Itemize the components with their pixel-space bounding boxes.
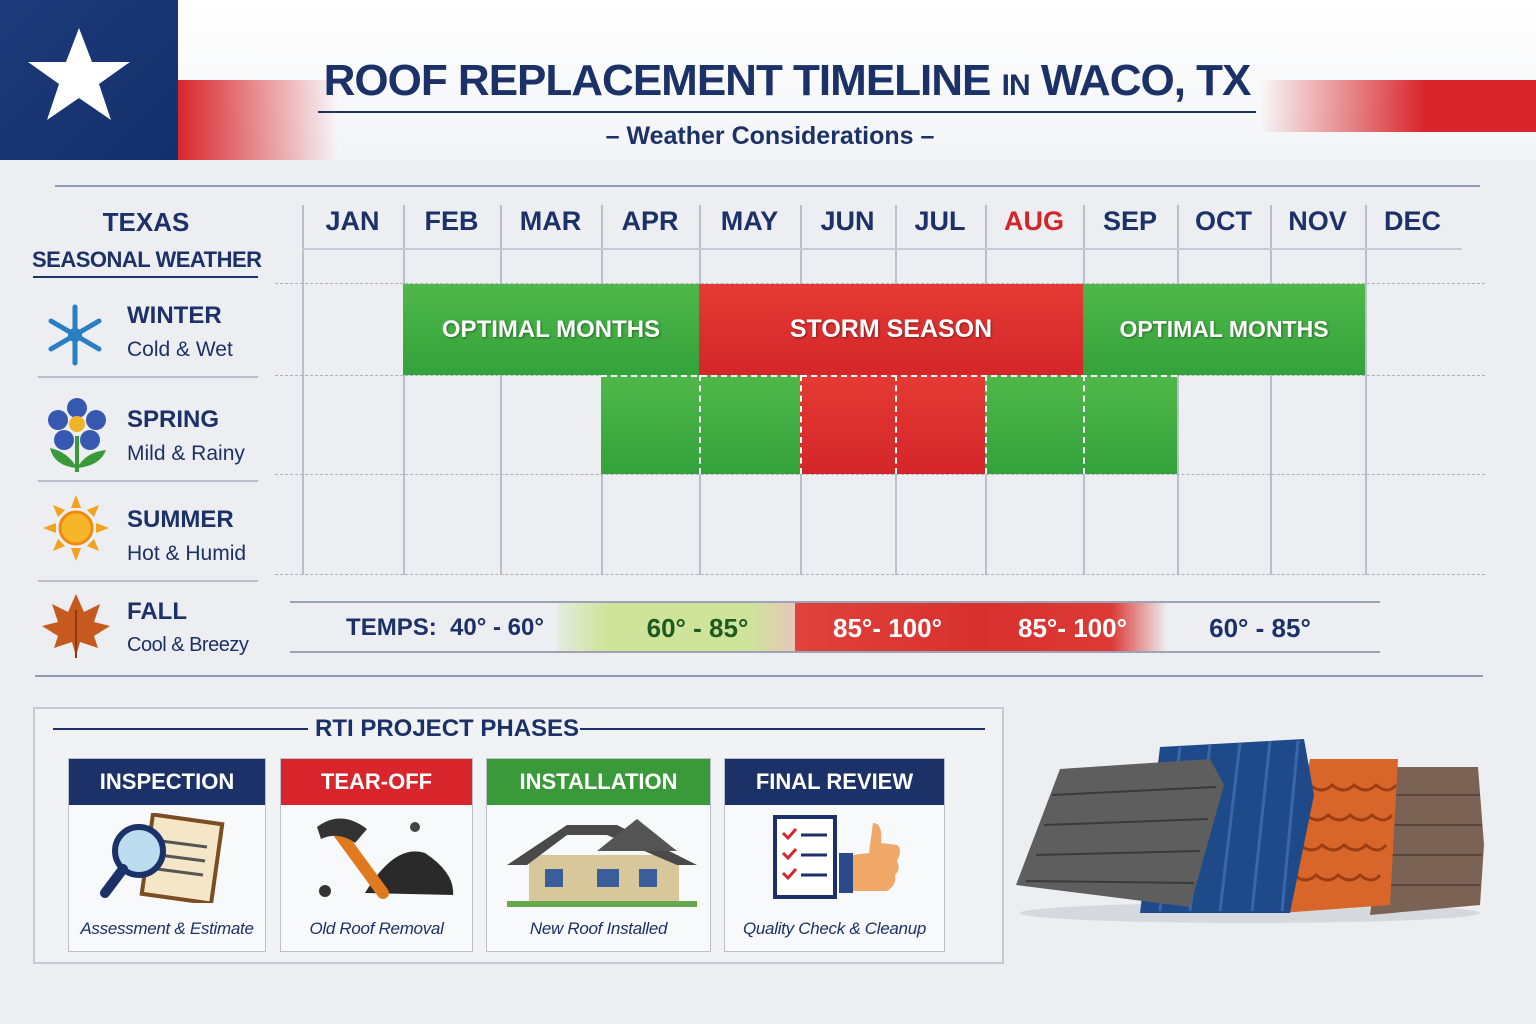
- card: installation: New Roof Installed: [530, 919, 667, 938]
- season: summer: [38, 492, 258, 582]
- row 2 bars: [601, 375, 1177, 474]
- bar: optimal months fall: OPTIMAL MONTHS: [1119, 316, 1329, 342]
- title: ROOF REPLACEMENT TIMELINE IN WACO, TX: [324, 56, 1250, 105]
- bar: optimal months spring: OPTIMAL MONTHS: [442, 316, 660, 342]
- season: winter: WINTER: [127, 302, 222, 329]
- left heading: [32, 207, 262, 272]
- card: tear-off: Old Roof Removal: [309, 919, 444, 938]
- temperature row: [290, 601, 1380, 653]
- month headers: JAN: [325, 206, 380, 236]
- bar: storm season: [699, 284, 1083, 375]
- left heading: TEXAS: [103, 207, 189, 237]
- season: summer: Hot & Humid: [127, 542, 246, 565]
- season: fall: FALL: [127, 598, 187, 625]
- card: inspection: [68, 758, 266, 952]
- temps labels: TEMPS: 40° - 60°: [346, 614, 544, 641]
- text: AUG: [1004, 206, 1064, 236]
- text: JUN: [820, 206, 874, 236]
- card: tear-off: [280, 758, 473, 952]
- season: spring: SPRING: [127, 406, 219, 433]
- card: final review: [724, 758, 945, 952]
- icon: star: [28, 28, 130, 120]
- bar: storm season: STORM SEASON: [790, 315, 992, 343]
- season: spring: [38, 392, 258, 482]
- text: SEP: [1103, 206, 1157, 236]
- text: OCT: [1195, 206, 1252, 236]
- left heading: SEASONAL WEATHER: [32, 247, 262, 272]
- card: installation: INSTALLATION: [519, 769, 678, 794]
- season: fall: [42, 594, 249, 658]
- illustration: roofing material samples: [1016, 739, 1484, 923]
- card: inspection: INSPECTION: [100, 769, 234, 794]
- season: spring: Mild & Rainy: [127, 442, 245, 465]
- panel: project phases: [33, 707, 1004, 964]
- text: APR: [621, 206, 678, 236]
- bar: optimal months spring: [403, 284, 699, 375]
- text: MAR: [520, 206, 581, 236]
- card: final review: Quality Check & Cleanup: [743, 919, 926, 938]
- card: tear-off: TEAR-OFF: [321, 769, 432, 794]
- card: final review: FINAL REVIEW: [756, 769, 913, 794]
- card: installation: [486, 758, 711, 952]
- subtitle: – Weather Considerations –: [606, 122, 934, 150]
- text: 85°- 100°: [1018, 612, 1127, 642]
- season: summer: SUMMER: [127, 506, 234, 533]
- bar: optimal months fall: [1083, 284, 1365, 375]
- text: JUL: [914, 206, 966, 236]
- season: fall: Cool & Breezy: [127, 634, 248, 656]
- card: inspection: Assessment & Estimate: [80, 919, 254, 938]
- text: MAY: [721, 206, 778, 236]
- text: 85°- 100°: [833, 612, 942, 642]
- heading: phases: RTI PROJECT PHASES: [315, 715, 579, 742]
- season: winter: [38, 288, 258, 378]
- text: DEC: [1384, 206, 1441, 236]
- text: FEB: [424, 206, 478, 236]
- text: NOV: [1288, 206, 1347, 236]
- header banner: [0, 0, 1536, 160]
- grid: [302, 205, 304, 575]
- text: 60° - 85°: [647, 612, 748, 642]
- texas flag: [0, 0, 178, 160]
- text: 60° - 85°: [1209, 612, 1311, 642]
- season: winter: Cold & Wet: [127, 338, 233, 361]
